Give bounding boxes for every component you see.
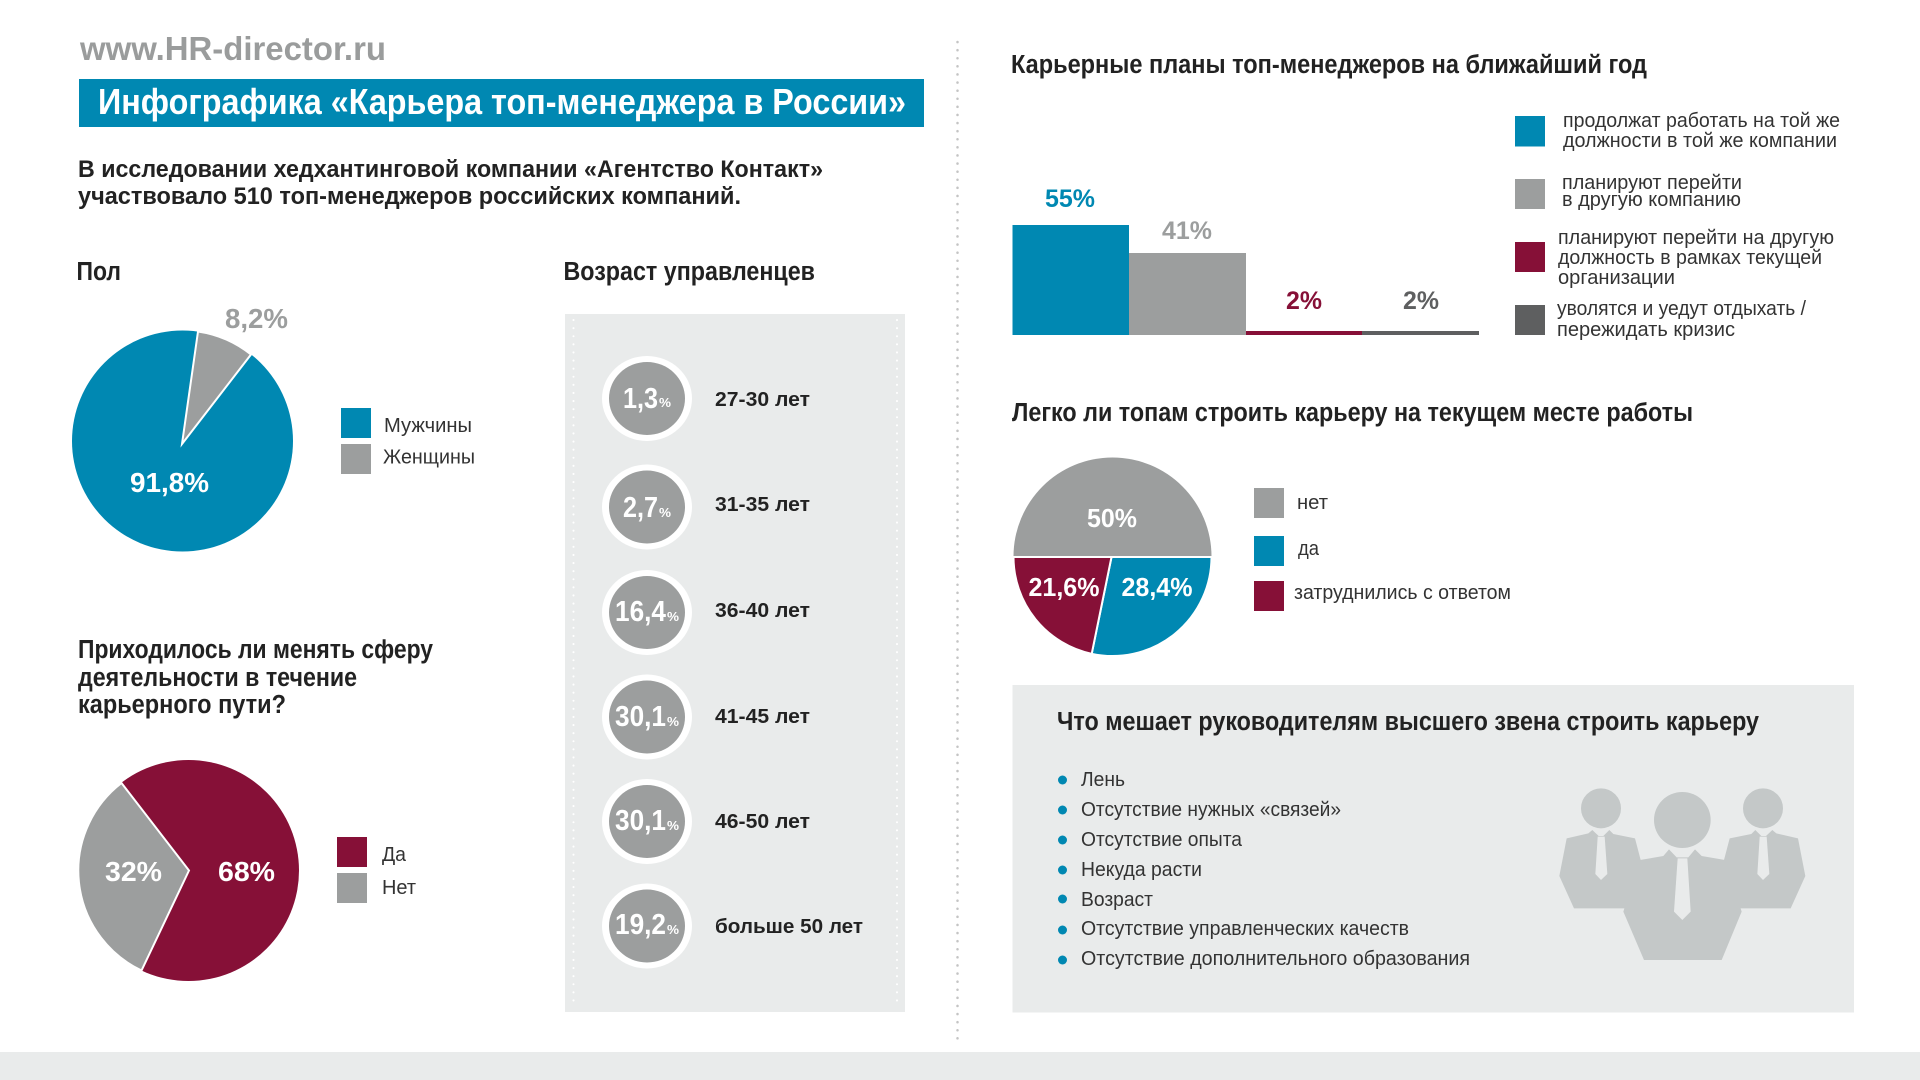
heading: career change xyxy=(78,636,434,719)
age row: over 50: больше 50 лет xyxy=(715,915,863,938)
bar chart: career plans xyxy=(1012,185,1479,335)
list: career obstacles: Возраст xyxy=(1081,888,1154,911)
age row: 36-40 xyxy=(602,570,810,655)
list: career obstacles: Отсутствие нужных «связей» xyxy=(1081,798,1341,821)
list: career obstacles xyxy=(1058,768,1470,970)
age row: 41-45: % xyxy=(667,714,679,729)
age row: over 50: % xyxy=(667,922,679,937)
list: career obstacles: Отсутствие дополнительного образования xyxy=(1081,947,1470,970)
age row: 27-30: 1,3 xyxy=(623,383,658,415)
pie chart: career change: 68% xyxy=(218,856,275,887)
legend: career plans: должность в рамках текущей xyxy=(1558,246,1822,269)
bar chart: career plans: 2% xyxy=(1403,287,1439,315)
age row: 36-40: % xyxy=(667,609,679,624)
age row: 46-50 xyxy=(602,779,810,864)
intro text: В исследовании хедхантинговой компании «Агентство Контакт» xyxy=(78,156,823,183)
list: career obstacles: Отсутствие управленческих качеств xyxy=(1081,917,1409,940)
bar chart: career plans: 2% xyxy=(1286,287,1322,315)
pie chart: career change xyxy=(78,760,299,981)
age row: 41-45: 41-45 лет xyxy=(715,705,810,728)
age row: over 50 xyxy=(602,884,863,968)
heading: ease of career building: Легко ли топам строить карьеру на текущем месте работы xyxy=(1012,399,1693,427)
age row: 27-30 xyxy=(602,356,810,441)
age row: 31-35 xyxy=(602,464,810,550)
age row: 31-35: % xyxy=(659,505,671,520)
intro text: участвовало 510 топ-менеджеров российских компаний. xyxy=(78,183,741,210)
age row: 46-50: 30,1 xyxy=(615,805,666,837)
panel: age xyxy=(565,314,905,1012)
legend: ease of career building xyxy=(1254,488,1511,611)
legend: career plans xyxy=(1515,109,1840,341)
heading: career change: Приходилось ли менять сферу xyxy=(78,636,434,664)
age row: 36-40: 36-40 лет xyxy=(715,599,810,622)
legend: career plans: планируют перейти на другую xyxy=(1558,226,1834,249)
legend: career plans: пережидать кризис xyxy=(1557,318,1735,341)
pie chart: gender: 8,2% xyxy=(225,303,288,334)
list: career obstacles: Некуда расти xyxy=(1081,858,1202,881)
age row: 27-30: 27-30 лет xyxy=(715,388,810,411)
heading: career change: карьерного пути? xyxy=(78,691,286,719)
heading: career change: деятельности в течение xyxy=(78,664,357,692)
legend: career plans: организации xyxy=(1558,266,1675,289)
heading: age: Возраст управленцев xyxy=(564,258,815,286)
panel: career obstacles xyxy=(1012,685,1854,1012)
legend: career plans: в другую компанию xyxy=(1562,188,1741,211)
heading: career obstacles: Что мешает руководителям высшего звена строить карьеру xyxy=(1057,708,1760,736)
age row: 46-50: % xyxy=(667,818,679,833)
heading: career plans: Карьерные планы топ-менеджеров на ближайший год xyxy=(1011,51,1647,79)
legend: gender xyxy=(341,408,475,474)
icon: three managers xyxy=(1559,788,1805,960)
legend: ease of career building: нет xyxy=(1297,491,1329,514)
age row: 41-45 xyxy=(602,674,810,760)
legend: career plans: уволятся и уедут отдыхать / xyxy=(1557,297,1806,320)
age row: over 50: 19,2 xyxy=(615,909,666,941)
pie chart: ease of career building: 28,4% xyxy=(1122,572,1192,602)
age row: 31-35: 2,7 xyxy=(623,492,658,524)
legend: ease of career building: да xyxy=(1298,537,1320,560)
legend: gender: Женщины xyxy=(383,446,475,468)
heading: gender: Пол xyxy=(76,258,121,286)
legend: career plans: должности в той же компании xyxy=(1563,129,1837,152)
age row: 31-35: 31-35 лет xyxy=(715,493,810,516)
legend: career change: Нет xyxy=(382,876,417,899)
legend: career change: Да xyxy=(382,843,407,866)
pie chart: ease of career building xyxy=(1014,458,1212,656)
intro text xyxy=(78,156,823,210)
pie chart: gender xyxy=(72,303,293,552)
list: career obstacles: Лень xyxy=(1081,768,1125,791)
pie chart: ease of career building: 21,6% xyxy=(1028,572,1100,602)
title banner: Инфографика «Карьера топ-менеджера в России» xyxy=(98,81,906,122)
legend: career plans: планируют перейти xyxy=(1562,171,1742,194)
legend: career plans: продолжат работать на той же xyxy=(1563,109,1840,132)
legend: gender: Мужчины xyxy=(384,414,472,437)
site name: www.HR-director.ru xyxy=(79,30,386,67)
list: career obstacles: Отсутствие опыта xyxy=(1081,828,1243,851)
age row: 27-30: % xyxy=(659,395,671,410)
age row: 46-50: 46-50 лет xyxy=(715,810,810,833)
bar chart: career plans: 41% xyxy=(1162,217,1212,245)
age row: 41-45: 30,1 xyxy=(615,701,666,733)
pie chart: gender: 91,8% xyxy=(130,467,209,498)
pie chart: ease of career building: 50% xyxy=(1087,503,1137,533)
age row: 36-40: 16,4 xyxy=(615,596,666,628)
legend: career change xyxy=(337,837,417,903)
pie chart: career change: 32% xyxy=(105,856,162,887)
bar chart: career plans: 55% xyxy=(1045,185,1095,213)
legend: ease of career building: затруднились с ответом xyxy=(1294,581,1511,604)
